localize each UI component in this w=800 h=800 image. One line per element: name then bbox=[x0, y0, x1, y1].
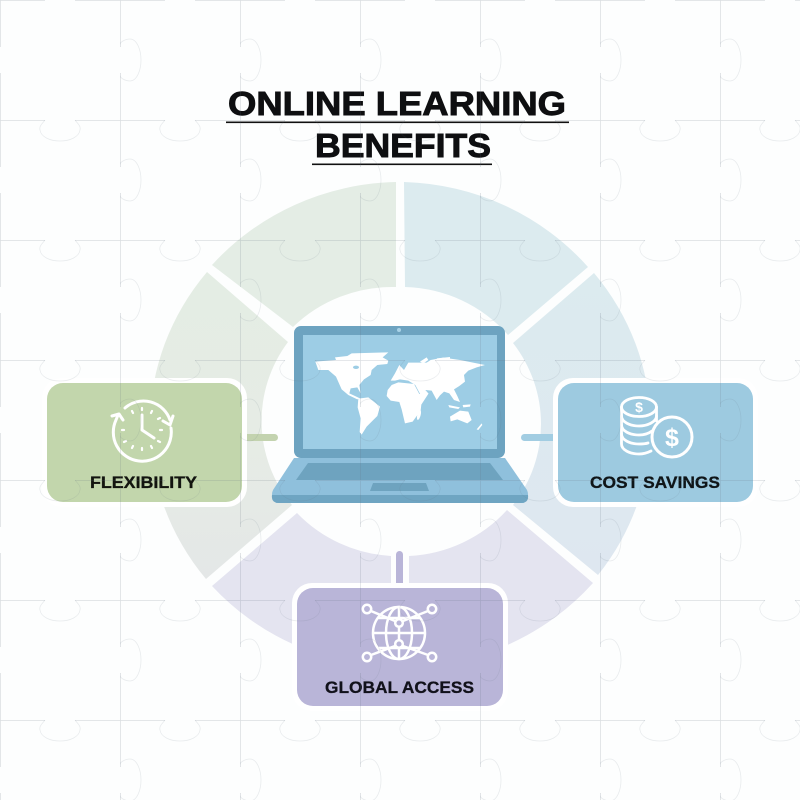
ring: six segments bbox=[150, 182, 651, 667]
laptop camera bbox=[397, 328, 401, 332]
segment: top right bbox=[404, 182, 588, 335]
stack dollar sign: $ bbox=[635, 399, 643, 415]
panel: cost savings bbox=[553, 378, 758, 507]
panel border bbox=[292, 583, 508, 711]
connector: flexibility bbox=[238, 434, 278, 441]
segment: bottom left bbox=[212, 513, 391, 667]
segment: right bbox=[513, 273, 651, 575]
segment: left bbox=[150, 272, 292, 579]
panel border bbox=[42, 378, 247, 507]
segment: top left bbox=[212, 182, 396, 327]
icon: network globe bbox=[363, 605, 436, 661]
title underline 1 bbox=[226, 122, 569, 123]
title bbox=[226, 85, 569, 165]
laptop lid bbox=[294, 326, 505, 458]
laptop screen bbox=[303, 335, 497, 449]
laptop base bbox=[272, 458, 528, 503]
panel border bbox=[553, 378, 758, 507]
laptop keyboard bbox=[296, 463, 503, 480]
segment: bottom right bbox=[409, 510, 593, 667]
connector: cost savings bbox=[521, 434, 563, 441]
label: COST SAVINGS bbox=[590, 474, 720, 492]
panel fill bbox=[558, 383, 753, 502]
laptop base front edge bbox=[272, 495, 528, 503]
laptop bbox=[272, 326, 528, 503]
connector: global access bbox=[396, 551, 403, 593]
panel: flexibility bbox=[42, 378, 247, 507]
title line 1: ONLINE LEARNING bbox=[228, 85, 566, 122]
world map bbox=[315, 352, 485, 435]
label: GLOBAL ACCESS bbox=[325, 679, 474, 697]
icon: coins bbox=[622, 398, 692, 457]
coin dollar sign: $ bbox=[665, 424, 679, 452]
label: FLEXIBILITY bbox=[90, 474, 197, 492]
panel fill bbox=[47, 383, 242, 502]
laptop trackpad bbox=[370, 483, 429, 491]
title line 2: BENEFITS bbox=[315, 127, 491, 164]
title underline 2 bbox=[312, 164, 492, 165]
icon: clock with arrows bbox=[112, 401, 173, 461]
panel: global access bbox=[292, 583, 508, 711]
panel fill bbox=[297, 588, 503, 706]
